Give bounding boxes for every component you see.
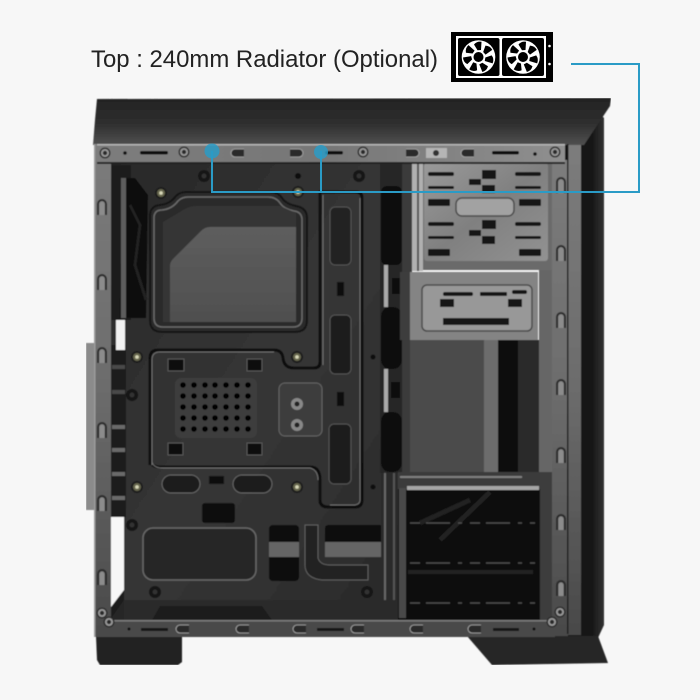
perforated plate — [175, 378, 257, 438]
drive cage — [398, 472, 553, 622]
computer case — [86, 98, 611, 665]
bottom rail — [111, 620, 555, 637]
right rails — [546, 144, 581, 636]
back plate slots and cutouts — [143, 207, 383, 581]
CPU cutout — [150, 192, 307, 332]
white gap behind expansion slots — [111, 515, 124, 607]
mount point marker right — [314, 145, 328, 159]
bottom floor with vent mesh — [110, 600, 398, 620]
mount point marker left — [204, 144, 220, 158]
right foot — [467, 636, 608, 665]
top panel — [93, 98, 611, 145]
rear fan — [111, 165, 148, 320]
main back plate — [111, 160, 411, 622]
lower right compartment — [410, 270, 553, 475]
motherboard emboss outline — [150, 192, 362, 507]
callout: blue connector lines to radiator mount points — [204, 64, 639, 192]
front panel side — [560, 116, 604, 640]
center column — [380, 163, 412, 619]
top rail — [97, 144, 565, 164]
left slot covers — [86, 343, 94, 510]
3.5 inch bracket — [400, 272, 538, 340]
left rail — [94, 144, 114, 637]
5.25 inch drive bay — [412, 162, 552, 271]
left foot — [96, 636, 182, 665]
heading: Top : 240mm Radiator (Optional) — [91, 46, 438, 73]
icon: 240mm radiator with two fans — [451, 32, 553, 82]
standoffs and screws on back plate — [126, 170, 376, 598]
expansion slot area — [111, 319, 126, 517]
